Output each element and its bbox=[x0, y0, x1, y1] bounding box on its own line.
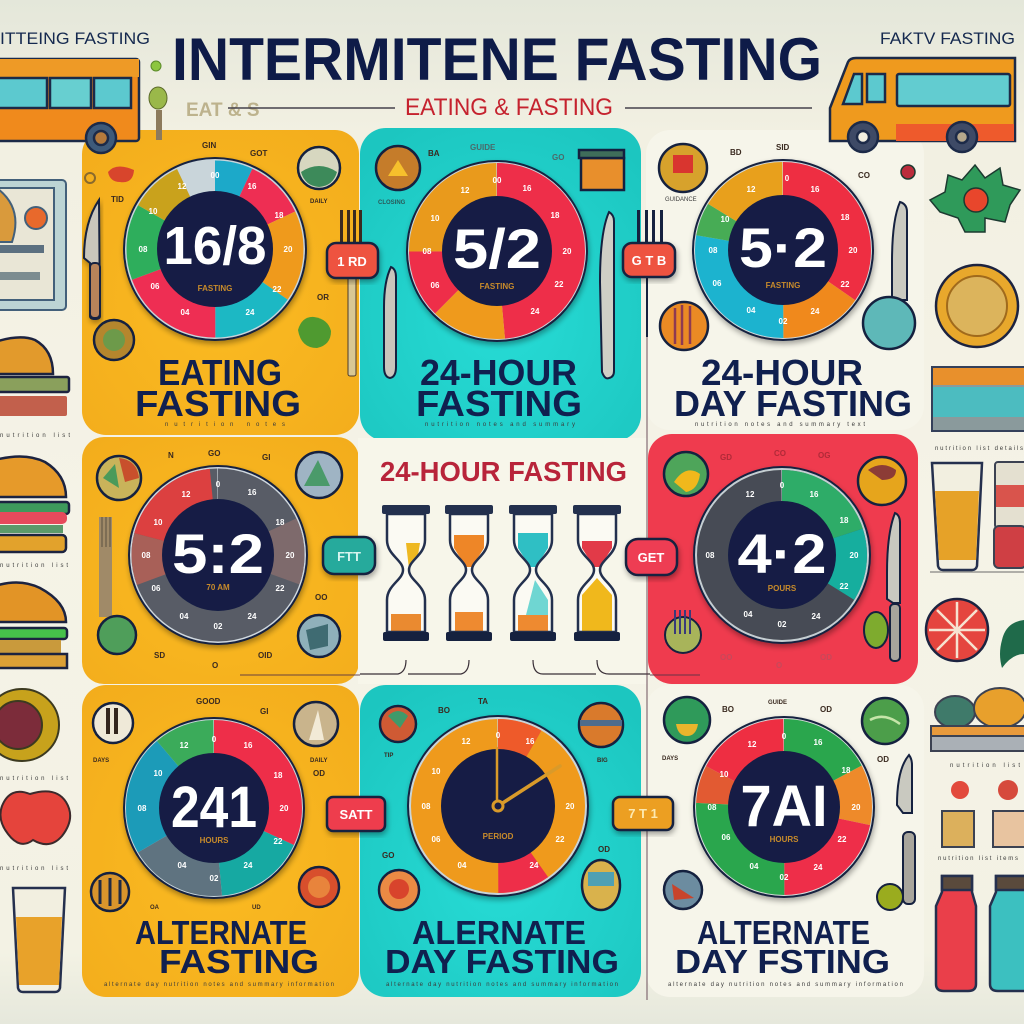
heading: 24-hour fasting: FASTING bbox=[416, 383, 582, 424]
micro labels bbox=[111, 141, 329, 302]
micro labels: OO bbox=[315, 593, 327, 602]
dial: 7AI: 7AI bbox=[740, 774, 828, 839]
dial: 5/2: 24 bbox=[531, 307, 540, 316]
dial: 5/2: 18 bbox=[551, 211, 560, 220]
dial: 5.2: 18 bbox=[841, 213, 850, 222]
dial: clock: 24 bbox=[530, 861, 539, 870]
subtitle: EAT & S bbox=[186, 100, 260, 121]
micro labels: GI bbox=[262, 453, 270, 462]
heading: alernate day fasting: DAY FASTING bbox=[385, 943, 619, 980]
icon: beer glass bbox=[932, 463, 982, 570]
icon: food left top bbox=[664, 452, 708, 496]
small text: nutrition notes and summary text bbox=[695, 422, 865, 428]
micro labels: BO bbox=[722, 705, 734, 714]
clock hands bbox=[493, 748, 560, 811]
dial: 7AI: 0 bbox=[782, 732, 787, 741]
dial: 7AI: HOURS bbox=[770, 835, 799, 844]
heading: 24-hour day fasting bbox=[674, 352, 912, 424]
micro labels: GUIDE bbox=[470, 143, 496, 152]
icon: bottom left food bbox=[664, 871, 702, 909]
text: burger note: nutrition list bbox=[0, 433, 70, 439]
icon: bottom left food bbox=[379, 870, 419, 910]
micro labels: GIN bbox=[202, 141, 216, 150]
panel: 16/8 eating fasting bbox=[82, 130, 359, 435]
icon: olive bbox=[864, 612, 888, 648]
icon: menu book bbox=[0, 180, 66, 310]
micro labels: CO bbox=[858, 171, 870, 180]
icon: triangle food bbox=[296, 452, 342, 498]
dial: clock: 12 bbox=[462, 737, 471, 746]
icon: food box bbox=[579, 150, 624, 190]
dial: 5:2: 10 bbox=[154, 518, 163, 527]
heading: alernate day fasting bbox=[385, 914, 619, 980]
dial: 4.2: 4·2 bbox=[738, 522, 826, 585]
micro labels bbox=[154, 449, 327, 670]
dial: 5:2: 12 bbox=[182, 490, 191, 499]
dial: 4.2: 18 bbox=[840, 516, 849, 525]
micro labels bbox=[93, 697, 327, 911]
micro labels: UD bbox=[252, 905, 261, 911]
dial: 5/2: 00 bbox=[493, 176, 502, 185]
icon: leafy greens bbox=[862, 698, 908, 744]
hourglass 4 bbox=[573, 505, 621, 641]
panel: 24/1 alternate fasting bbox=[82, 685, 359, 997]
dial: 5:2: 08 bbox=[142, 551, 151, 560]
dial: 5:2: 22 bbox=[276, 584, 285, 593]
dial: 16/8: 16/8 bbox=[164, 216, 266, 276]
icon: green bowl bbox=[664, 697, 710, 743]
icon: greens bbox=[298, 317, 331, 348]
dial: clock: 20 bbox=[566, 802, 575, 811]
dial: 16/8: 00 bbox=[211, 171, 220, 180]
micro labels: OD bbox=[598, 845, 610, 854]
icon: food right top bbox=[858, 457, 906, 505]
dial: 241: 04 bbox=[178, 861, 187, 870]
dial: 5:2: 04 bbox=[180, 612, 189, 621]
icon: bowl bbox=[376, 146, 420, 190]
dial: 7AI: 24 bbox=[814, 863, 823, 872]
pill badge 5: SATT bbox=[340, 807, 373, 822]
micro labels: BD bbox=[730, 148, 742, 157]
dial: 16/8: 16 bbox=[248, 182, 257, 191]
dial: 5:2: 70 AM bbox=[206, 583, 230, 592]
icon: blue food bbox=[298, 615, 340, 657]
dial: 7AI: 22 bbox=[838, 835, 847, 844]
dial: clock: 04 bbox=[458, 861, 467, 870]
hourglass 3 bbox=[509, 505, 557, 641]
dial: 5/2: 16 bbox=[523, 184, 532, 193]
dial: 241: 22 bbox=[274, 837, 283, 846]
icon: red bottle bbox=[994, 462, 1024, 568]
icon: fork panel 1 bbox=[340, 210, 362, 376]
heading: alternate day fsting bbox=[675, 914, 890, 980]
small text: nutrition notes and summary bbox=[425, 422, 575, 428]
dial: 4.2: 04 bbox=[744, 610, 753, 619]
dial: 5.2: 04 bbox=[747, 306, 756, 315]
dial: 16/8: 12 bbox=[178, 182, 187, 191]
panel: 7AI alternate day fasting bbox=[646, 685, 924, 997]
micro labels: TA bbox=[478, 697, 488, 706]
dial: 5/2 bbox=[406, 160, 588, 342]
panel: 4.2 mid right bbox=[648, 434, 918, 684]
dial: 7AI: 08 bbox=[708, 803, 717, 812]
subtitle: EATING & FASTING bbox=[405, 94, 613, 121]
dial: 5.2: 10 bbox=[721, 215, 730, 224]
icon: burger 2 bbox=[0, 456, 69, 552]
micro labels: GD bbox=[720, 453, 732, 462]
icon: bottom right food bbox=[299, 867, 339, 907]
dividers bbox=[240, 280, 700, 1000]
dial: 5.2: 5·2 bbox=[739, 216, 827, 279]
icon: green food with fork bbox=[98, 517, 136, 654]
micro labels: BIG bbox=[597, 758, 608, 764]
connectors bbox=[360, 660, 650, 674]
icon: bottom left food bbox=[91, 873, 129, 911]
text: right note 3: nutrition list bbox=[950, 763, 1020, 769]
pill badge 5 bbox=[327, 797, 385, 831]
dial: 5:2: 16 bbox=[248, 488, 257, 497]
micro labels: OG bbox=[818, 451, 830, 460]
dial: clock bbox=[407, 715, 589, 897]
micro labels bbox=[720, 449, 832, 670]
icon: juice glass bbox=[13, 888, 65, 992]
dial: 241: HOURS bbox=[200, 836, 229, 845]
dial: 4.2: 12 bbox=[746, 490, 755, 499]
micro labels: TID bbox=[111, 195, 124, 204]
dial: 7AI: 12 bbox=[748, 740, 757, 749]
pill badge 6: 7 T 1 bbox=[628, 806, 658, 821]
micro labels: BA bbox=[428, 149, 440, 158]
dial: clock: 22 bbox=[556, 835, 565, 844]
dial: 5:2: 02 bbox=[214, 622, 223, 631]
micro labels: CLOSING bbox=[378, 200, 406, 206]
text: left note 2: nutrition list bbox=[0, 866, 68, 872]
dial: 4.2 bbox=[693, 466, 871, 644]
micro labels: GI bbox=[260, 707, 268, 716]
icon: knife bbox=[897, 755, 915, 904]
dial: 4.2: 20 bbox=[850, 551, 859, 560]
text: left note: nutrition list bbox=[0, 776, 68, 782]
micro labels: OA bbox=[150, 905, 160, 911]
dial: 16/8: FASTING bbox=[198, 284, 232, 293]
pill badge 4: GET bbox=[638, 550, 664, 565]
dial: 5/2: 12 bbox=[461, 186, 470, 195]
dial: 7AI: 06 bbox=[722, 833, 731, 842]
dial: clock: 10 bbox=[432, 767, 441, 776]
dial: 5/2: 06 bbox=[431, 281, 440, 290]
dial: 16/8: 22 bbox=[273, 285, 282, 294]
dial: 4.2: 24 bbox=[812, 612, 821, 621]
pill badge 3 bbox=[323, 537, 375, 574]
heading: eating fasting: FASTING bbox=[135, 383, 301, 424]
icon: truck right bbox=[830, 58, 1015, 152]
icon: bus left bbox=[0, 59, 139, 153]
icon: top left food bbox=[93, 703, 133, 743]
dial: 4.2: 02 bbox=[778, 620, 787, 629]
dial: 5.2: 12 bbox=[747, 185, 756, 194]
panel: 5.2 24-hour day fasting bbox=[646, 130, 924, 430]
dial: 5.2: 22 bbox=[841, 280, 850, 289]
icon: bottom right food bbox=[582, 860, 620, 910]
micro labels bbox=[382, 697, 610, 860]
icon: top right food bbox=[294, 702, 338, 746]
icon: leafy plant bbox=[901, 165, 1020, 232]
micro labels: O bbox=[212, 661, 218, 670]
dial: 7AI: 16 bbox=[814, 738, 823, 747]
icon: knife bbox=[887, 513, 900, 661]
dial: 5/2: 22 bbox=[555, 280, 564, 289]
dial: 4.2: 22 bbox=[840, 582, 849, 591]
dial: 241: 0 bbox=[212, 735, 217, 744]
micro labels: OR bbox=[317, 293, 329, 302]
heading: alternate day fsting: ALTERNATE bbox=[697, 914, 870, 951]
dial: 5/2: FASTING bbox=[480, 282, 514, 291]
micro labels: SD bbox=[154, 651, 165, 660]
micro labels: OD bbox=[313, 769, 325, 778]
dial: 5:2 bbox=[128, 465, 308, 645]
heading: alternate fasting bbox=[135, 914, 319, 980]
dial: 5:2: 24 bbox=[248, 612, 257, 621]
heading: alternate fasting: FASTING bbox=[159, 943, 319, 980]
dial: 16/8: 06 bbox=[151, 282, 160, 291]
text: right note 4: nutrition list items bbox=[938, 856, 1018, 862]
dial: clock: 0 bbox=[496, 731, 501, 740]
dial: 5/2: 10 bbox=[431, 214, 440, 223]
dial: clock: 16 bbox=[526, 737, 535, 746]
micro labels: O bbox=[776, 661, 782, 670]
micro labels: GO bbox=[208, 449, 220, 458]
dial: 4.2: 0 bbox=[780, 481, 785, 490]
pill badge 6 bbox=[613, 797, 673, 830]
pill badge 2 bbox=[623, 243, 675, 277]
dial: 241: 24 bbox=[244, 861, 253, 870]
dial: 4.2: POURS bbox=[768, 584, 797, 593]
dial: 7AI: 18 bbox=[842, 766, 851, 775]
icon: swirl food bbox=[97, 456, 141, 500]
icon: shop front bbox=[932, 367, 1024, 431]
small text: alternate day nutrition notes and summary information bbox=[668, 982, 903, 988]
icon: knife panel 2 right bbox=[600, 212, 614, 378]
micro labels: DAYS bbox=[662, 756, 678, 762]
micro labels bbox=[378, 143, 564, 206]
dial: clock: 06 bbox=[432, 835, 441, 844]
hourglass 2 bbox=[445, 505, 493, 641]
icon: round food left bbox=[0, 689, 59, 761]
icon: teal juice bottle bbox=[990, 876, 1024, 991]
micro labels: GO bbox=[382, 851, 394, 860]
dial: 7AI: 04 bbox=[750, 862, 759, 871]
micro labels: DAILY bbox=[310, 199, 327, 205]
micro labels: OO bbox=[720, 653, 732, 662]
icon: herb bbox=[1000, 620, 1024, 668]
micro labels: SID bbox=[776, 143, 790, 152]
pill badge 4 bbox=[626, 539, 677, 575]
small food icons bbox=[85, 166, 134, 183]
heading: alternate fasting: ALTERNATE bbox=[135, 914, 307, 951]
dial: 16/8: 20 bbox=[284, 245, 293, 254]
icon: citrus slice bbox=[926, 599, 988, 661]
icon: knife panel 2 left bbox=[384, 267, 396, 378]
subtitle bbox=[186, 94, 812, 121]
small text: alternate day nutrition notes and summary information bbox=[386, 982, 618, 988]
dial: 5.2 bbox=[692, 159, 874, 341]
icon: knife and teal plate bbox=[863, 202, 915, 349]
icon: tree and dot bbox=[149, 61, 167, 140]
dial: clock: PERIOD bbox=[483, 832, 514, 841]
micro labels: BO bbox=[438, 706, 450, 715]
micro labels: GOT bbox=[250, 149, 267, 158]
micro labels: DAILY bbox=[310, 758, 327, 764]
icon: fork and bowl bbox=[665, 610, 701, 653]
dial: 4.2: 16 bbox=[810, 490, 819, 499]
dial: 241: 02 bbox=[210, 874, 219, 883]
title: INTERMITENE FASTING bbox=[172, 26, 822, 93]
dial: 4.2: 08 bbox=[706, 551, 715, 560]
dial: 16/8: 04 bbox=[181, 308, 190, 317]
dial: 241: 08 bbox=[138, 804, 147, 813]
text: right note: nutrition list details bbox=[935, 446, 1023, 452]
heading: 24-hour day fasting: DAY FASTING bbox=[674, 383, 912, 424]
dial: 5.2: FASTING bbox=[766, 281, 800, 290]
dial: 5.2: 02 bbox=[779, 317, 788, 326]
heading: 24-hour fasting: 24-HOUR bbox=[420, 352, 577, 393]
dial: 7AI: 02 bbox=[780, 873, 789, 882]
dial: clock: 08 bbox=[422, 802, 431, 811]
heading: alernate day fasting: ALERNATE bbox=[412, 914, 586, 951]
icon: fork panel 2 bbox=[637, 210, 663, 337]
dial: 5:2: 5:2 bbox=[172, 522, 264, 585]
dial: 16/8: 10 bbox=[149, 207, 158, 216]
micro labels: GUIDE bbox=[768, 700, 787, 706]
dial: 5:2: 20 bbox=[286, 551, 295, 560]
icon: food tray bbox=[931, 688, 1024, 751]
dial: 5:2: 0 bbox=[216, 480, 221, 489]
icon: cup bbox=[659, 144, 707, 192]
micro labels: GO bbox=[552, 153, 564, 162]
micro labels: TIP bbox=[384, 753, 393, 759]
dial: 5.2: 16 bbox=[811, 185, 820, 194]
dial: 16/8: 18 bbox=[275, 211, 284, 220]
dial: 16/8: 08 bbox=[139, 245, 148, 254]
heading: 24-hour fasting bbox=[416, 352, 582, 424]
corner label right: FAKTV FASTING bbox=[880, 29, 1015, 48]
heading: eating fasting bbox=[135, 352, 301, 424]
icon: knife panel 1 bbox=[84, 200, 100, 319]
icon: red juice bottle bbox=[936, 876, 976, 991]
dial: 5/2: 20 bbox=[563, 247, 572, 256]
icon: jars bbox=[942, 780, 1024, 847]
icon: gold plate bbox=[936, 265, 1018, 347]
icon: burger 3 bbox=[0, 582, 67, 668]
dial: 7AI: 10 bbox=[720, 770, 729, 779]
text: burger note 2: nutrition list bbox=[0, 563, 68, 569]
icon: salad bowl bbox=[298, 147, 340, 189]
dial: 241: 241 bbox=[171, 775, 257, 840]
panel: 24-hour fasting hourglasses bbox=[358, 438, 650, 684]
dial: 241: 20 bbox=[280, 804, 289, 813]
panel: 5:2 mid left bbox=[82, 437, 359, 684]
dial: 5.2: 08 bbox=[709, 246, 718, 255]
icon: burger 1 bbox=[0, 337, 69, 416]
dial: 5/2: 08 bbox=[423, 247, 432, 256]
icon: striped food bbox=[660, 302, 708, 350]
dial: 5.2: 06 bbox=[713, 279, 722, 288]
dial: 5:2: 06 bbox=[152, 584, 161, 593]
dial: 5/2: 5/2 bbox=[453, 217, 541, 280]
icon: top left food bbox=[380, 706, 416, 742]
micro labels: N bbox=[168, 451, 174, 460]
dial: 5.2: 0 bbox=[785, 174, 790, 183]
icon: apple bbox=[0, 791, 70, 844]
small label: GUIDANCE bbox=[665, 197, 697, 203]
icon: top right food bbox=[579, 703, 623, 747]
micro labels: GOOD bbox=[196, 697, 221, 706]
pill badge 1 bbox=[327, 243, 378, 278]
micro labels: OD bbox=[820, 705, 832, 714]
micro labels: DAYS bbox=[93, 758, 109, 764]
dial: 241: 18 bbox=[274, 771, 283, 780]
dial: 16/8 bbox=[123, 157, 307, 341]
corner label left: ITTEING FASTING bbox=[0, 29, 150, 48]
dial: 241: 12 bbox=[180, 741, 189, 750]
dial: 16/8: 24 bbox=[246, 308, 255, 317]
dial: 241 bbox=[123, 717, 305, 899]
icon: green dot food bbox=[877, 884, 903, 910]
pill badge 2: G T B bbox=[632, 253, 666, 268]
heading: eating fasting: EATING bbox=[158, 352, 282, 393]
small text: alternate day nutrition notes and summary information bbox=[104, 982, 334, 988]
micro labels: OD bbox=[877, 755, 889, 764]
shelf line bbox=[930, 571, 1024, 573]
dial: 5.2: 24 bbox=[811, 307, 820, 316]
micro labels: OID bbox=[258, 651, 272, 660]
heading: alternate day fsting: DAY FSTING bbox=[675, 943, 890, 980]
dial: 7AI bbox=[693, 716, 875, 898]
heading: 24-hour fasting: 24-HOUR FASTING bbox=[380, 456, 627, 487]
dial: 7AI: 20 bbox=[852, 803, 861, 812]
panel: clock alternate day fasting bbox=[360, 685, 641, 997]
panel: 5/2 24-hour fasting bbox=[360, 128, 641, 441]
dial: 5.2: 20 bbox=[849, 246, 858, 255]
dial: 241: 16 bbox=[244, 741, 253, 750]
small text: nutrition notes bbox=[165, 422, 285, 428]
micro labels: CO bbox=[774, 449, 786, 458]
micro labels bbox=[730, 143, 870, 180]
micro labels: OD bbox=[820, 653, 832, 662]
pill badge 3: FTT bbox=[337, 549, 361, 564]
dial: 241: 10 bbox=[154, 769, 163, 778]
pill badge 1: 1 RD bbox=[337, 254, 367, 269]
hourglass 1 bbox=[382, 505, 430, 641]
dial: 5:2: 18 bbox=[276, 518, 285, 527]
micro labels bbox=[662, 700, 889, 764]
icon: food plate bbox=[94, 320, 134, 360]
heading: 24-hour day fasting: 24-HOUR bbox=[701, 352, 863, 393]
